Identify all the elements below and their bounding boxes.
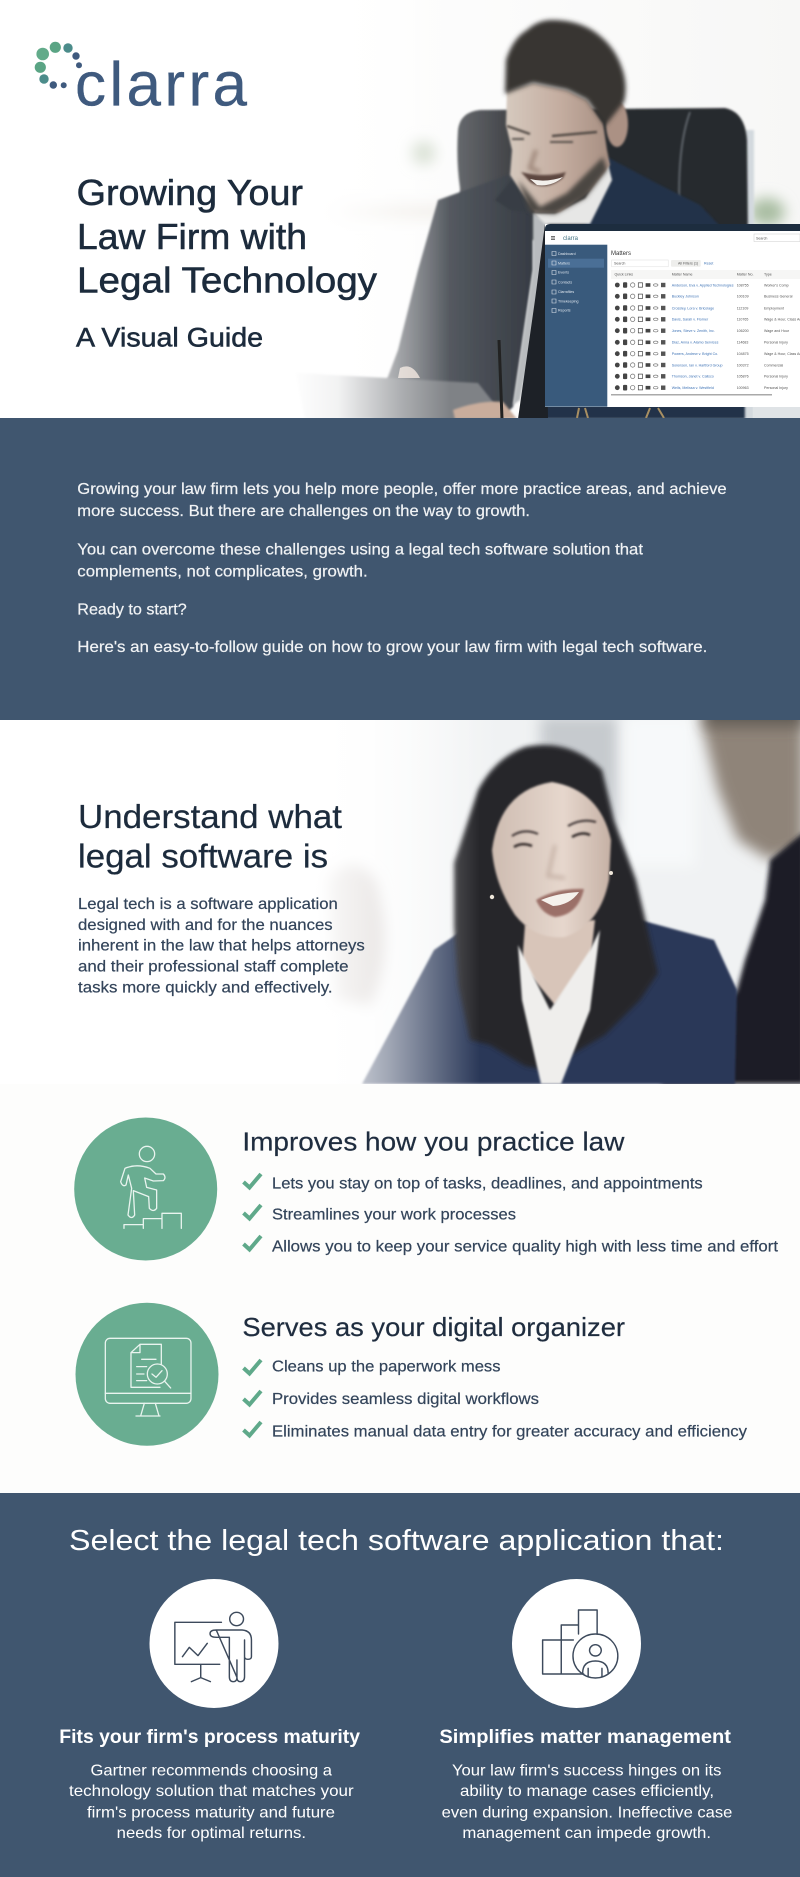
section heading: Understand what	[78, 798, 342, 835]
screenshot: matters software: 100963	[737, 386, 749, 390]
screenshot: matters software: Type	[764, 273, 772, 277]
subtitle: A Visual Guide	[76, 323, 263, 353]
screenshot: matters software: Business General	[764, 295, 793, 299]
screenshot: matters software: 106200	[737, 329, 749, 333]
card text: technology solution that matches your	[69, 1783, 354, 1800]
screenshot: matters software: Wells, Melissa v. Westfield	[672, 386, 714, 390]
screenshot: matters software: Search	[614, 262, 625, 266]
section description: and their professional staff complete	[78, 959, 349, 976]
jacket	[540, 157, 745, 419]
section description: inherent in the law that helps attorneys	[78, 938, 365, 955]
head	[606, 101, 628, 147]
screenshot: matters software: 112109	[737, 306, 748, 310]
card text: firm's process maturity and future	[87, 1804, 335, 1821]
screenshot: matters software: Employment	[764, 306, 784, 310]
heading: Serves as your digital organizer	[242, 1312, 625, 1342]
screenshot: matters software: Crossley, Lora v. Bricolage	[672, 306, 714, 310]
card text: Gartner recommends choosing a	[90, 1762, 332, 1779]
blurred colleague	[700, 716, 800, 860]
photo: smiling woman	[338, 720, 800, 1084]
checklist: Cleans up the paperwork mess	[272, 1358, 500, 1375]
icon: monitor with document	[76, 1303, 218, 1446]
card text: needs for optimal returns.	[117, 1825, 306, 1842]
section: understand legal software	[78, 720, 800, 1084]
section description	[78, 896, 365, 996]
intro paragraph 2	[77, 541, 644, 580]
screenshot: matters software	[545, 224, 800, 407]
intro paragraph 1: more success. But there are challenges on the way to growth.	[77, 503, 530, 520]
hero section	[0, 0, 800, 420]
screenshot: matters software: Timekeeping	[558, 299, 578, 303]
screenshot: matters software: Reports	[558, 309, 571, 313]
screenshot: matters software: Clarrafiles	[558, 290, 574, 294]
screenshot: matters software: 108755	[737, 283, 749, 287]
screenshot: matters software: Matters	[558, 261, 570, 265]
panel: improves how you practice law	[74, 1118, 779, 1260]
screenshot: matters software: 110765	[737, 318, 748, 322]
screenshot: matters software: 100109	[737, 295, 749, 299]
checklist: Allows you to keep your service quality high with less time and effort	[272, 1238, 779, 1255]
checklist: Streamlines your work processes	[272, 1207, 516, 1224]
screenshot: matters software: clarra	[563, 236, 579, 242]
card text: management can impede growth.	[462, 1825, 711, 1842]
card: process maturity	[59, 1579, 360, 1842]
icon: person climbing steps	[74, 1118, 217, 1260]
screenshot: matters software: 114683	[737, 341, 748, 345]
screenshot: matters software: 104875	[737, 352, 749, 356]
screenshot: matters software: Commercial	[764, 363, 783, 367]
checklist: Eliminates manual data entry for greater accuracy and efficiency	[272, 1424, 747, 1441]
checklist	[244, 1358, 747, 1441]
intro paragraph 2: complements, not complicates, growth.	[77, 563, 368, 580]
woman	[362, 920, 737, 1084]
screenshot: matters software: Sorensen, Ian v. Hartford Group	[672, 363, 723, 367]
screenshot: matters software: Personal Injury	[764, 341, 788, 345]
icon: bar chart with person	[512, 1579, 641, 1708]
section heading: legal software is	[78, 838, 328, 875]
screenshot: matters software: 105876	[737, 375, 749, 379]
card heading: Fits your firm's process maturity	[59, 1726, 360, 1748]
screenshot: matters software: Contacts	[558, 280, 572, 284]
checklist	[244, 1174, 779, 1255]
section description: Legal tech is a software application	[78, 896, 338, 913]
tablet and hands	[321, 376, 494, 418]
screenshot: matters software: All Filters (1)	[678, 262, 698, 266]
screenshot: matters software: Powers, Andrew v. Bright Co.	[672, 352, 718, 356]
screenshot: matters software: Personal Injury	[764, 386, 788, 390]
section heading	[78, 798, 342, 875]
title: Legal Technology	[77, 260, 377, 301]
screenshot: matters software: Matter Name	[672, 273, 692, 277]
screenshot: matters software: 100372	[737, 363, 749, 367]
card: matter management	[439, 1579, 733, 1842]
checklist: Provides seamless digital workflows	[272, 1391, 539, 1408]
card heading: Simplifies matter management	[439, 1726, 732, 1748]
card text	[69, 1762, 354, 1842]
title	[77, 172, 377, 301]
screenshot: matters software: Anderson, Eva v. Applied Technologies	[672, 283, 734, 287]
intro paragraph 4: Here's an easy-to-follow guide on how to grow your law firm with legal tech software.	[77, 639, 707, 656]
section heading: Select the legal tech software application that:	[69, 1525, 724, 1557]
card text: Your law firm's success hinges on its	[452, 1762, 721, 1779]
screenshot: matters software: Quick Links	[614, 273, 633, 277]
card text	[442, 1762, 733, 1842]
screenshot: matters software: Dashboard	[558, 252, 576, 256]
intro paragraph 1: Growing your law firm lets you help more people, offer more practice areas, and achieve	[77, 481, 727, 498]
card text: even during expansion. Ineffective case	[442, 1804, 733, 1821]
card text: ability to manage cases efficiently,	[460, 1783, 714, 1800]
screenshot: matters software: Search	[756, 236, 767, 240]
screenshot: matters software: Events	[558, 271, 569, 275]
heading: Improves how you practice law	[242, 1127, 625, 1157]
title: Growing Your	[77, 172, 303, 213]
panel: select the software	[0, 1493, 800, 1877]
intro paragraph 1	[77, 481, 727, 520]
intro paragraph 3: Ready to start?	[77, 601, 187, 618]
screenshot: matters software: Wage and Hour	[764, 329, 790, 333]
checklist: Lets you stay on top of tasks, deadlines, and appointments	[272, 1175, 703, 1192]
screenshot: matters software: Jones, Steve v. Zenith, Inc.	[672, 329, 715, 333]
screenshot: matters software: Matter No.	[737, 273, 753, 277]
logo: clarra: clarra	[75, 50, 248, 119]
screenshot: matters software: Davis, Sarah v. Florner	[672, 318, 709, 322]
panel: serves as your digital organizer	[76, 1303, 747, 1446]
title: Law Firm with	[77, 216, 307, 257]
screenshot: matters software: Worker's Comp	[764, 283, 789, 287]
screenshot: matters software: Personal Injury	[764, 375, 788, 379]
icon: presenter at board	[150, 1579, 278, 1708]
intro paragraph 2: You can overcome these challenges using a legal tech software solution that	[77, 541, 644, 558]
screenshot: matters software: Buckley Johnson	[672, 295, 699, 299]
panel: introduction band	[0, 418, 800, 720]
screenshot: matters software: Thomson, Janet v. Calisco	[672, 375, 714, 379]
screenshot: matters software: Diaz, Anna v. Alamo Services	[672, 341, 719, 345]
chair	[457, 108, 748, 240]
screenshot: matters software: Reset	[704, 262, 713, 266]
screenshot: matters software: Matters	[611, 251, 631, 257]
section description: tasks more quickly and effectively.	[78, 979, 333, 996]
hero photo: man at desk	[328, 16, 800, 418]
section description: designed with and for the nuances	[78, 917, 333, 934]
